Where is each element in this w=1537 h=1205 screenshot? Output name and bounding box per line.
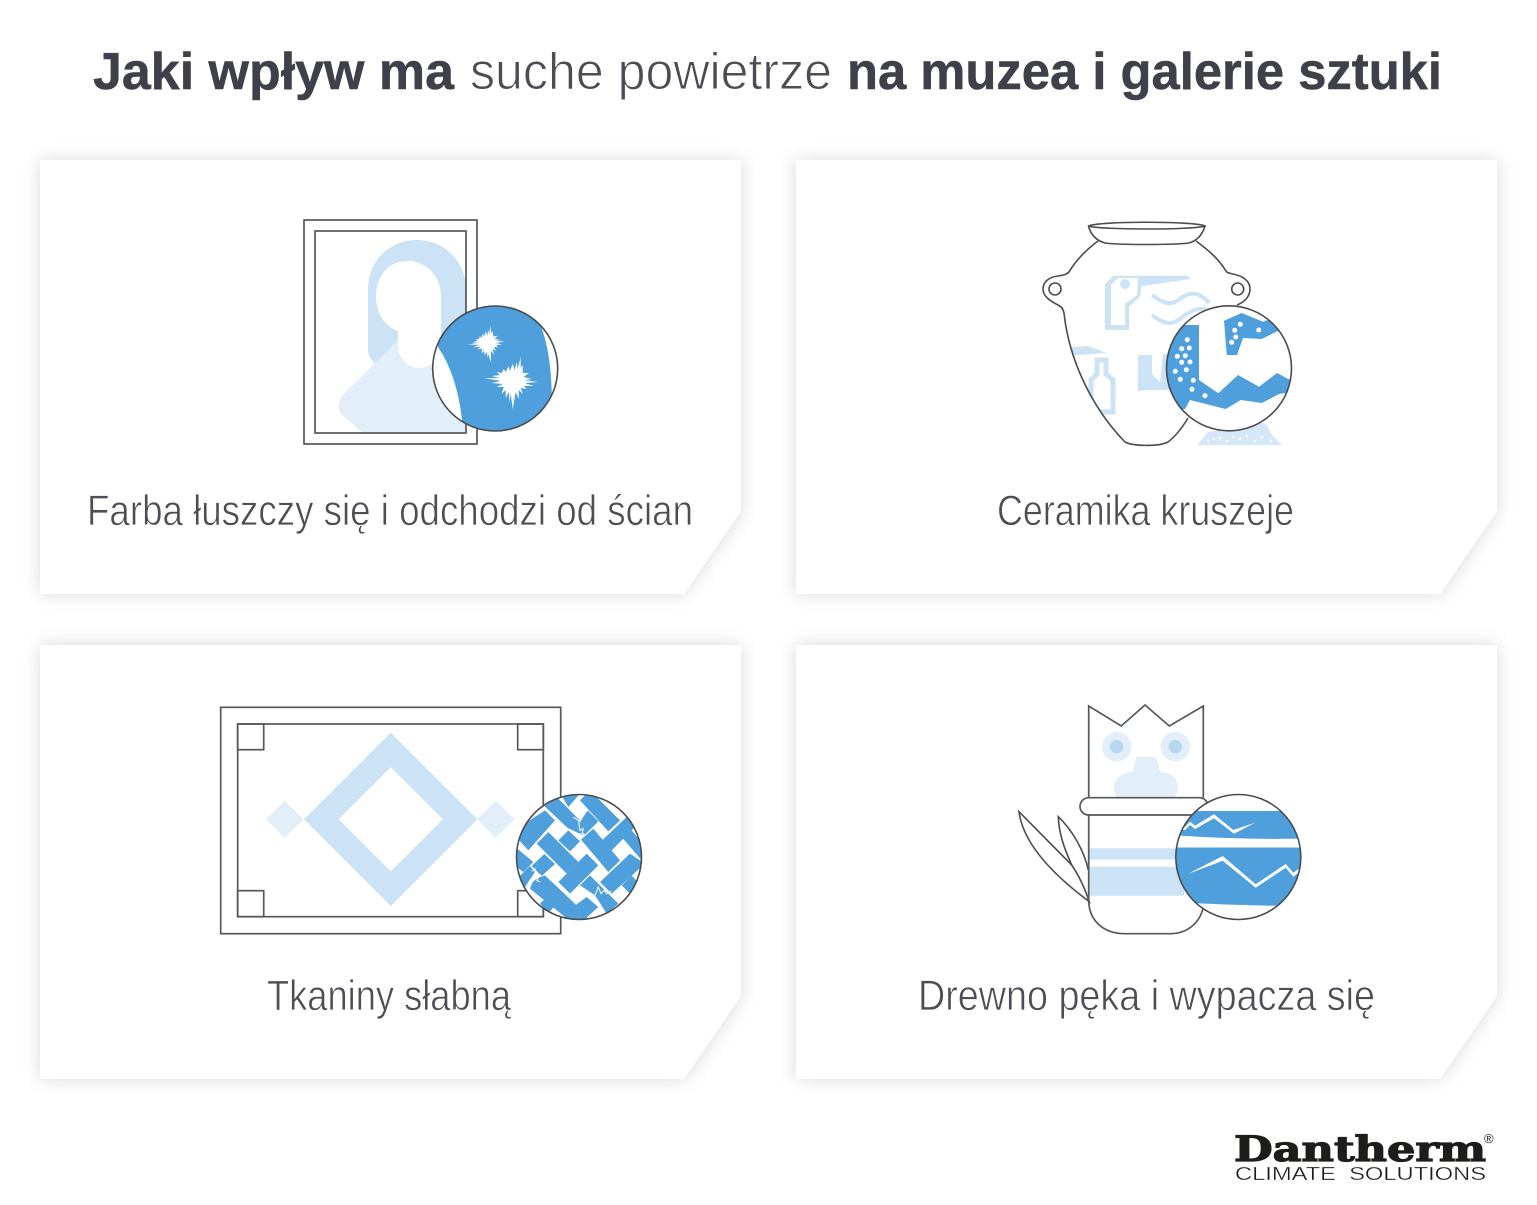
title: Jaki wpływ ma (93, 43, 455, 101)
vase decoration (1060, 276, 1209, 412)
leaves (1019, 812, 1089, 902)
card background (40, 645, 741, 1079)
face (1102, 732, 1190, 797)
logo: Dantherm: ® (1484, 1131, 1494, 1146)
panel: wood cracks (796, 645, 1497, 1079)
icon: tapestry with magnifier (221, 707, 647, 934)
magnifier: flaking paint (433, 300, 558, 440)
label: Drewno pęka i wypacza się (918, 972, 1375, 1020)
label: Ceramika kruszeje (997, 487, 1294, 535)
logo: Dantherm: CLIMATE SOLUTIONS (1235, 1164, 1486, 1184)
title: na muzea i galerie sztuki (847, 43, 1442, 101)
magnifier: cracked wood (1170, 794, 1310, 920)
title (93, 43, 1442, 101)
icon: portrait painting with magnifier (304, 220, 558, 444)
card background (796, 645, 1497, 1079)
magnifier: weave (516, 794, 642, 920)
label: Tkaniny słabną (267, 972, 511, 1020)
icon: wooden figure with magnifier (1019, 705, 1310, 934)
card background (796, 160, 1497, 594)
stripes (1089, 848, 1184, 896)
panel: ceramics crumble (796, 160, 1497, 594)
magnifier: crumbling ceramic (1150, 306, 1292, 431)
logo: Dantherm: Dantherm (1234, 1129, 1486, 1170)
portrait figure (338, 240, 466, 433)
label: Farba łuszczy się i odchodzi od ścian (87, 487, 693, 535)
logo: Dantherm (1234, 1129, 1494, 1184)
vase lip (1088, 222, 1205, 244)
side diamonds (266, 801, 514, 838)
figure outline (1089, 705, 1203, 798)
central diamond (304, 733, 477, 906)
panel: textiles weaken (40, 645, 741, 1079)
card background (40, 160, 741, 594)
icon: vase with magnifier (1043, 222, 1292, 445)
title: suche powietrze (470, 43, 832, 101)
panel: paint flaking (40, 160, 741, 594)
crumbs pile (1197, 423, 1282, 445)
